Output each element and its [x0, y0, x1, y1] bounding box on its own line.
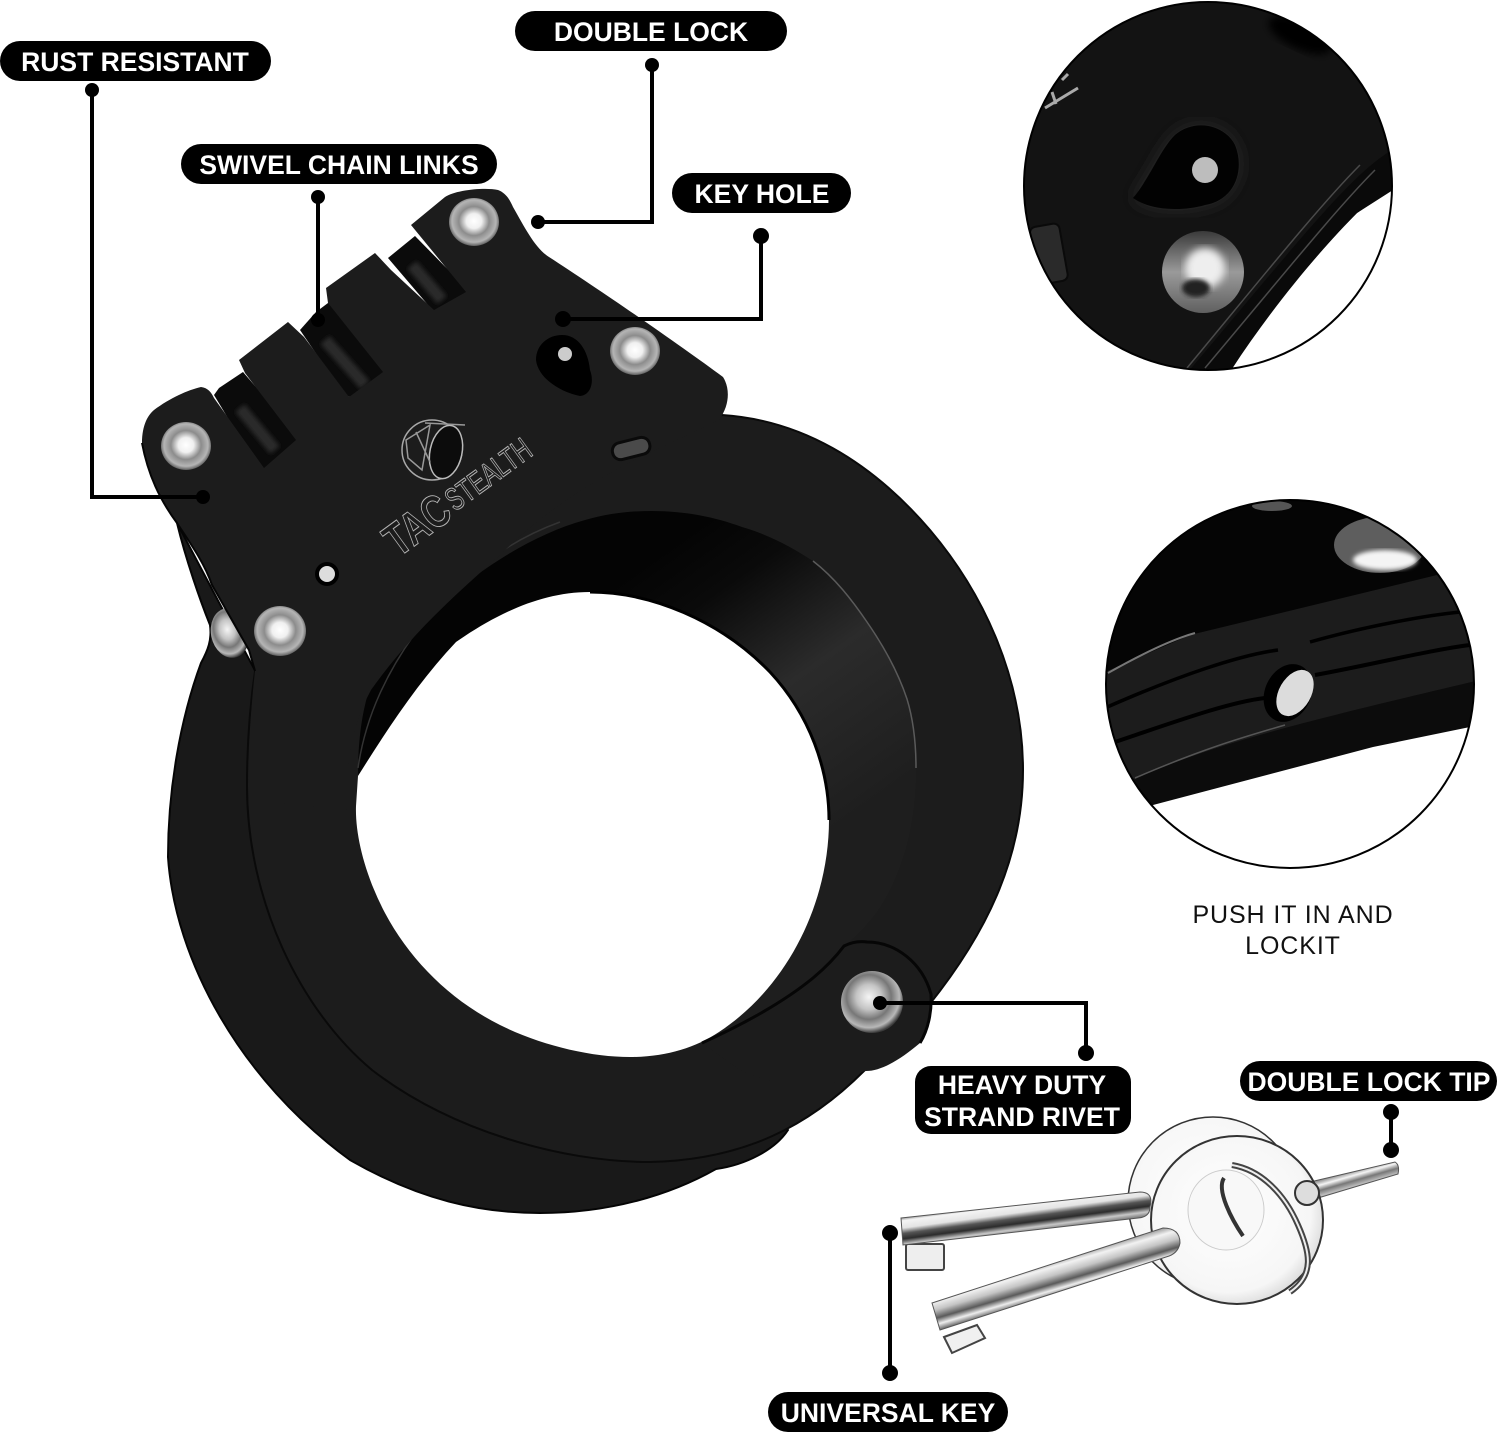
- key ring: [1232, 1165, 1308, 1292]
- inset background: [1108, 501, 1437, 806]
- leader line: [92, 90, 205, 497]
- rivet shadow: [1182, 279, 1210, 297]
- plate edge bands: [1188, 150, 1396, 372]
- inner cuff surface: [358, 511, 916, 1043]
- pill: [1240, 1061, 1497, 1101]
- callout: double lock tip: [1240, 1061, 1497, 1158]
- pin: [1192, 157, 1218, 183]
- groove lower: [1115, 645, 1470, 742]
- bottom highlight: [1135, 725, 1285, 778]
- bottom band: [1134, 682, 1473, 784]
- key 1 bit: [906, 1244, 944, 1270]
- dark spot: [1269, 16, 1330, 54]
- groove upper: [1105, 612, 1460, 708]
- leader line: [888, 1233, 892, 1373]
- key hole: [536, 335, 592, 396]
- crease highlight: [813, 561, 916, 768]
- pin: [1276, 670, 1314, 716]
- rivet arm lobe: [702, 942, 931, 1086]
- front disc: [1151, 1136, 1323, 1304]
- inner ring strand: [1222, 1178, 1243, 1236]
- pill: [0, 41, 271, 81]
- leader line: [880, 1003, 1086, 1053]
- key 2 bit: [944, 1325, 985, 1353]
- callout: swivel chain links: [181, 144, 497, 327]
- callout: heavy duty strand rivet: [873, 996, 1131, 1134]
- rear rivet: [206, 605, 254, 661]
- inset circle: double lock detail: [1107, 501, 1473, 806]
- keys illustration: [901, 1117, 1399, 1353]
- inset background: [1020, 0, 1396, 372]
- plate rivet left: [161, 422, 211, 470]
- logo text: STEALTH: [438, 431, 538, 518]
- leader line: [1389, 1112, 1393, 1150]
- instruction text: PUSH IT IN AND: [1192, 901, 1394, 929]
- plate side band: [1107, 575, 1473, 780]
- plate rivet bottom: [254, 606, 306, 656]
- double lock slot: [611, 436, 652, 461]
- plate edge: [142, 443, 255, 671]
- swivel roller right: [388, 236, 468, 312]
- slot: [1029, 223, 1069, 285]
- dots: [555, 228, 769, 327]
- leader line: [563, 236, 761, 319]
- callout: rust resistant: [0, 41, 271, 504]
- leader line: [538, 65, 652, 222]
- label: STRAND RIVET: [924, 1102, 1120, 1132]
- label: DOUBLE LOCK: [554, 17, 748, 47]
- key hole: [1133, 125, 1239, 209]
- pill: [515, 11, 787, 51]
- edge highlights: [1187, 165, 1375, 368]
- dots: [1383, 1104, 1399, 1158]
- inset outline 2: [1106, 500, 1474, 868]
- front cuff ring: [247, 415, 1023, 1162]
- pill: [915, 1066, 1131, 1134]
- leader line: [316, 197, 320, 320]
- rear cuff: [168, 523, 788, 1213]
- top highlight edge: [1108, 633, 1195, 673]
- inner ring line: [358, 522, 560, 768]
- logo emblem: [402, 420, 467, 482]
- key 2 shaft: [932, 1228, 1180, 1330]
- swivel roller left: [214, 372, 298, 468]
- label: DOUBLE LOCK TIP: [1248, 1067, 1490, 1097]
- key hole halo: [1133, 125, 1239, 209]
- dots: [311, 190, 325, 327]
- logo text: TAC: [373, 483, 461, 566]
- dots: [85, 83, 210, 504]
- opening shadow edge: [590, 592, 829, 820]
- rear disc: [1128, 1117, 1298, 1287]
- dots: [531, 58, 659, 229]
- plate rivet top: [449, 198, 499, 246]
- rivet: [1334, 517, 1426, 573]
- top rivet fragment: [1252, 501, 1292, 511]
- pill: [768, 1392, 1008, 1432]
- key 1 shaft: [901, 1192, 1151, 1245]
- roller sheen: [240, 265, 442, 450]
- large rivet: [1162, 231, 1244, 313]
- swivel roller middle: [300, 300, 385, 398]
- disc hole: [1188, 1170, 1264, 1250]
- label: KEY HOLE: [695, 179, 829, 209]
- key hole pin: [558, 347, 572, 361]
- instruction text: LOCKIT: [1245, 932, 1341, 960]
- inset outline 1: [1024, 2, 1392, 370]
- cutout: [1233, 191, 1391, 368]
- key ring highlight: [1232, 1165, 1308, 1292]
- tip key ball: [1295, 1181, 1319, 1205]
- cutout: [1152, 727, 1468, 867]
- pill: [672, 173, 851, 213]
- inset circle: key hole detail: [1020, 0, 1400, 375]
- cuff opening: [356, 592, 829, 1057]
- callout: double lock: [515, 11, 787, 229]
- pill: [181, 144, 497, 184]
- label: SWIVEL CHAIN LINKS: [199, 150, 479, 180]
- dots: [873, 996, 1094, 1061]
- label: RUST RESISTANT: [21, 47, 249, 77]
- callout: universal key: [768, 1225, 1008, 1432]
- pin hole: [1264, 664, 1311, 722]
- tip key: [1310, 1162, 1399, 1198]
- arm edge: [702, 942, 931, 1043]
- lock plate: [142, 189, 728, 810]
- small pin: [315, 562, 339, 586]
- handcuff illustration: [142, 189, 1023, 1213]
- strand rivet: [841, 971, 903, 1033]
- label: UNIVERSAL KEY: [781, 1398, 996, 1428]
- dots: [882, 1225, 898, 1381]
- label: HEAVY DUTY: [938, 1070, 1106, 1100]
- logo fragment: [1045, 74, 1078, 108]
- callout: key hole: [555, 173, 851, 327]
- small pin head: [319, 566, 335, 582]
- rivet highlight: [1353, 550, 1417, 570]
- rivet highlight: [1185, 248, 1225, 288]
- plate rivet right: [610, 327, 660, 375]
- logo text: [373, 431, 538, 566]
